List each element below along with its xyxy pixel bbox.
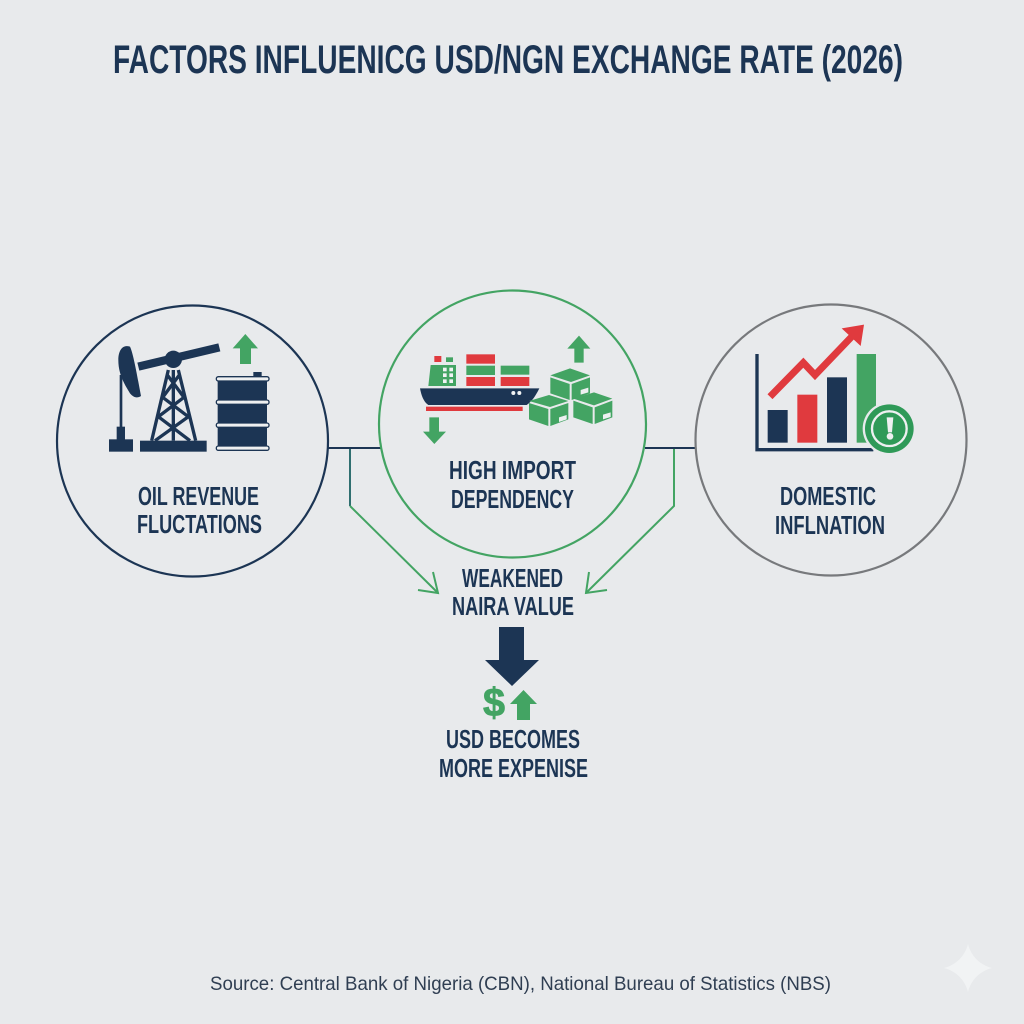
up arrow	[567, 336, 590, 363]
connector: centre circle to right circle	[645, 447, 696, 449]
panel: domestic inflation	[696, 304, 966, 576]
arrow: left factors to weakened naira	[350, 449, 438, 593]
icon: dollar sign with up arrow	[483, 681, 537, 725]
up arrow	[233, 334, 258, 364]
label: inflation: INFLNATION	[775, 512, 885, 540]
label: domestic: DOMESTIC	[780, 483, 876, 511]
boxes	[529, 368, 612, 426]
label: fluctuations: FLUCTATIONS	[137, 511, 262, 539]
label: dependency: DEPENDENCY	[451, 486, 574, 514]
outcome text: weakened naira value	[452, 565, 574, 621]
label: oil revenue: OIL REVENUE	[138, 483, 259, 511]
icon: sparkle watermark	[944, 944, 992, 992]
outcome text: usd becomes more expensive	[439, 726, 588, 783]
panel: oil revenue fluctuations	[57, 306, 328, 576]
arrow: right factors to weakened naira	[586, 449, 674, 593]
outcome text: weakened naira value: WEAKENED	[462, 565, 563, 593]
connector: left circle to centre circle	[328, 447, 381, 449]
icon: oil pump, barrel and up arrow	[109, 334, 269, 452]
label: high import: HIGH IMPORT	[449, 457, 576, 485]
panel: high import dependency	[379, 290, 646, 558]
rising red arrow	[770, 325, 864, 397]
source note: Source: Central Bank of Nigeria (CBN), National Bureau of Statistics (NBS)	[210, 973, 831, 995]
bars	[768, 354, 876, 443]
outcome text: weakened naira value: NAIRA VALUE	[452, 593, 574, 621]
icon: cargo ship and boxes	[420, 336, 612, 444]
arrow: down to USD outcome	[485, 627, 539, 686]
oil barrel	[216, 372, 269, 450]
alert badge	[863, 402, 916, 455]
icon: bar chart with rising arrow and alert badge	[757, 325, 916, 455]
cargo ship	[420, 354, 539, 411]
down arrow	[423, 417, 446, 444]
icon: dollar sign with up arrow: $	[483, 681, 505, 725]
outcome text: usd becomes more expensive: USD BECOMES	[446, 726, 580, 754]
oil pump jack and derrick	[109, 343, 220, 452]
outcome text: usd becomes more expensive: MORE EXPENISE	[439, 755, 588, 783]
chart axes	[757, 354, 873, 450]
